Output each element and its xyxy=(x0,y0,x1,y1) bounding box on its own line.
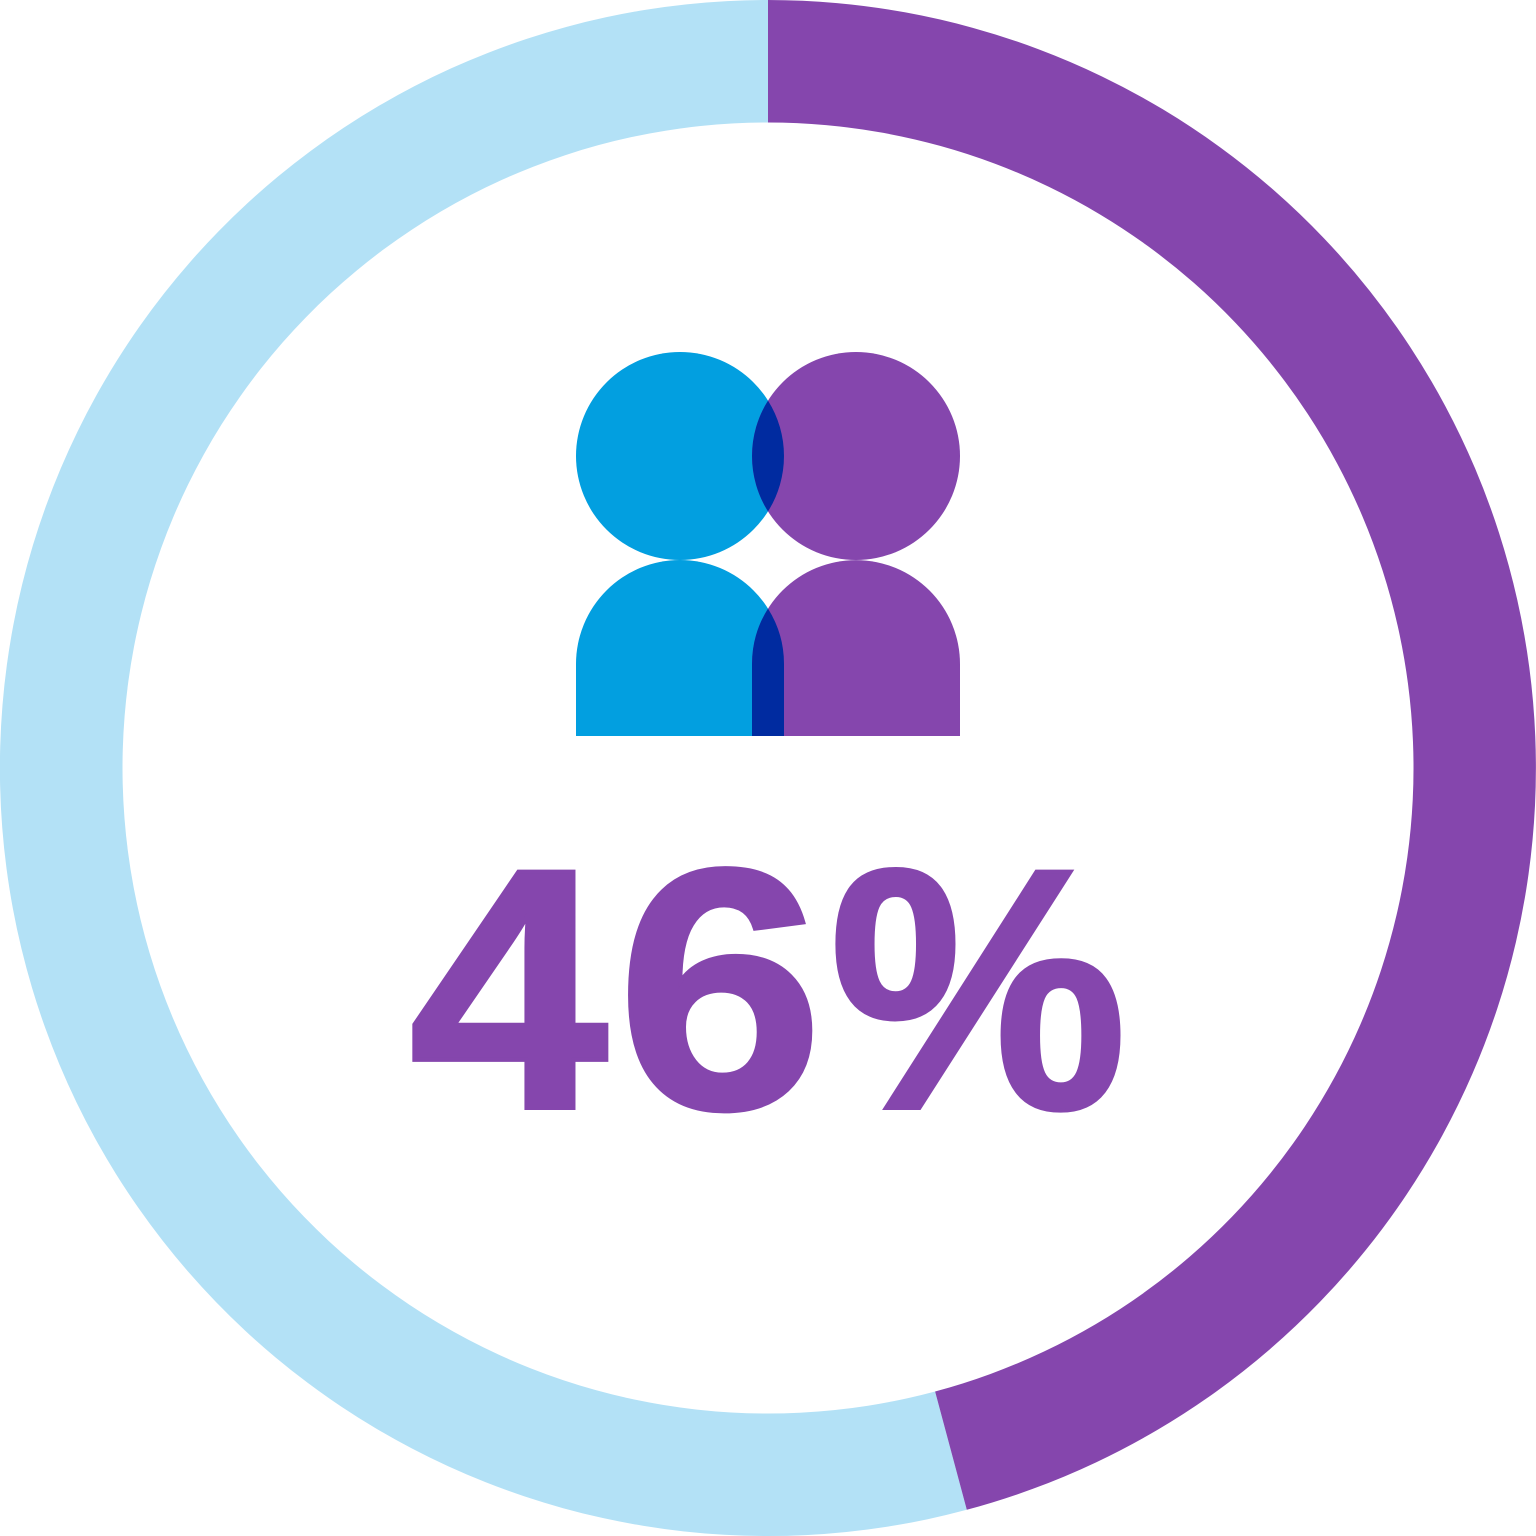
percentage figure: 4 xyxy=(409,797,610,1181)
icon: overlap between people xyxy=(752,401,784,736)
percentage figure: 6 xyxy=(617,797,824,1181)
icon: right person xyxy=(752,352,960,736)
icon: two overlapping people xyxy=(576,352,960,736)
percentage figure xyxy=(409,797,1127,1181)
icon: left person xyxy=(576,352,784,736)
ring segment: remainder xyxy=(0,0,967,1536)
ring segment: 46 percent xyxy=(768,0,1536,1510)
percentage figure: % xyxy=(829,797,1127,1181)
